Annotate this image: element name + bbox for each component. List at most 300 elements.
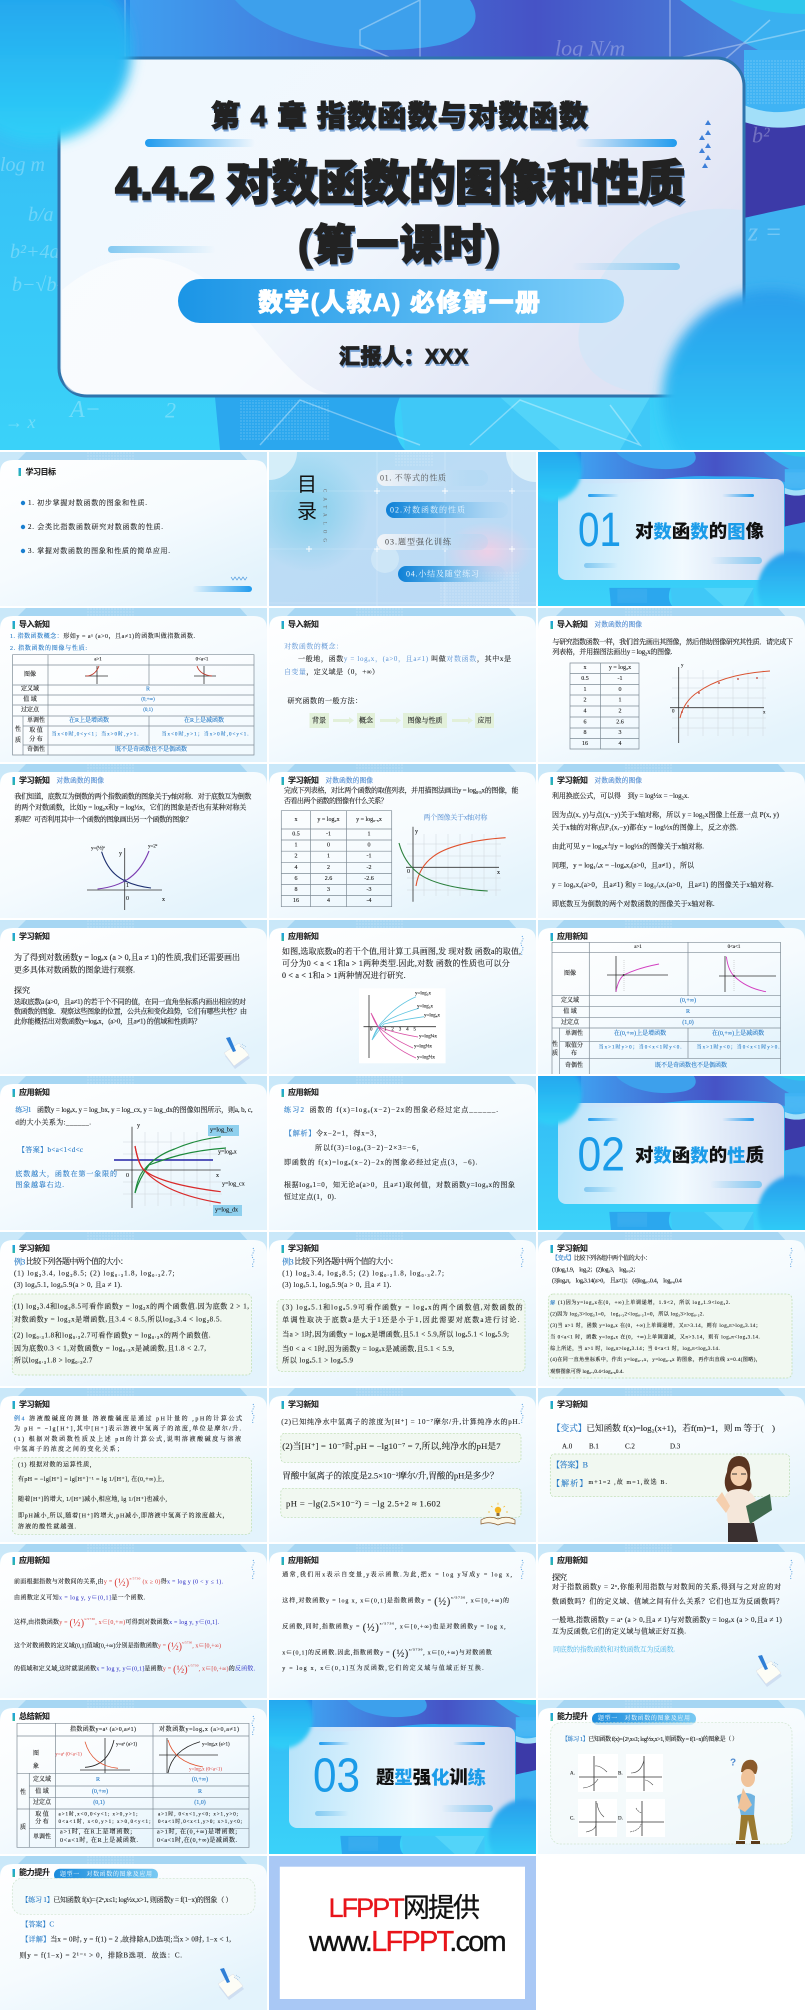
- corner blobs: [0, 0, 805, 450]
- option graph A: A.: [570, 1772, 575, 1776]
- chart: exponential pair: [55, 1738, 137, 1773]
- chart: exponentials: y: [119, 851, 122, 857]
- panel: inverse relationship colored: [0, 1544, 267, 1698]
- answer box: [548, 1294, 792, 1378]
- bars: [584, 494, 762, 568]
- property table: 0<a<1: [728, 945, 741, 950]
- derivation lines: 由此可见 y = log₂x与y = log½x的图像关于x轴对称.: [552, 842, 704, 851]
- main title: 4.4.2 对数函数的图像和性质: [115, 156, 685, 210]
- corner blobs: [252, 1686, 562, 1875]
- paragraph: 可分为0 < a < 1和a > 1两种类型.因此,对数 函数的性质也可以分: [282, 958, 510, 968]
- panel: practice answer: [0, 1856, 267, 2010]
- panel: example 3 part 1: [0, 1232, 267, 1386]
- heading: 学习新知: [19, 931, 50, 941]
- explore paragraph: 选取底数a (a>0，且a≠1) 的若干个不同的值，在同一直角坐标系内画出相应的对: [14, 997, 246, 1007]
- chart: family of log curves: y=log⅓x: [414, 1044, 432, 1050]
- heading: 学习新知: [557, 775, 588, 785]
- intro lines: 1. 指数函数概念：形如y = aˣ (a>0，且a≠1)的函数叫做指数函数.: [10, 632, 196, 640]
- comparison table: (1,0): [194, 1799, 206, 1806]
- answer box: 所以log₀.₃1.8 > log₀.₃2.7: [14, 1356, 93, 1365]
- answer box: 因为底数0.3 < 1,对数函数y = log₀.₃x是减函数,且1.8 < 2.7,: [14, 1343, 206, 1352]
- property table: 0<a<1: [196, 658, 209, 662]
- derivation text: 的值域和定义域,这时就说函数x = log y, y∈(0,1]是函数y = (½): [14, 1664, 188, 1675]
- paragraph: [284, 785, 518, 805]
- panel: log type graph: [269, 920, 536, 1074]
- value table: 6: [584, 720, 586, 726]
- question: (3)logₐπ， logₐ3.14(a>0， 且a≠1)； (4)log₀.₇0.4， log₀.₆0.4: [552, 1277, 682, 1285]
- derivation text: [282, 1571, 512, 1672]
- answer: 【答案】C: [22, 1919, 54, 1928]
- paragraph: 否看出两个函数的图像有什么关系？: [284, 796, 388, 805]
- chart: mirrored logs: [399, 827, 506, 902]
- value table: 4: [584, 708, 586, 714]
- value table: -3: [366, 887, 372, 893]
- property table: 既不是奇函数也不是偶函数: [115, 745, 187, 753]
- intro paragraph: 为了得到对数函数y = logₐx (a > 0,且a ≠ 1)的性质,我们还需要画出: [14, 952, 240, 962]
- comparison table: a>1时, 在(0,+∞)是增函数;: [157, 1828, 237, 1836]
- value table: 3: [327, 887, 330, 893]
- goal list: 1. 初步掌握对数函数的图象和性质.: [28, 498, 147, 507]
- contents item 01: 01. 不等式的性质: [380, 472, 446, 482]
- property table: a>1: [634, 945, 642, 950]
- card inner soft shapes: [62, 209, 742, 394]
- solution: [284, 1128, 515, 1202]
- contents item 02: [386, 502, 508, 518]
- panel: table of contents slide: [269, 452, 536, 606]
- property table: 既不是奇函数也不是偶函数: [655, 1061, 727, 1069]
- faint math formula decoration: A−: [68, 397, 101, 423]
- heading: 总结新知: [19, 1711, 50, 1721]
- comparison table: (0,+∞): [92, 1788, 108, 1795]
- section number: 03: [313, 1750, 360, 1802]
- property table: 奇偶性: [27, 745, 45, 753]
- section card: [558, 1103, 784, 1204]
- derivation text: x∈(0,1]的反函数.因此,指数函数y = (½): [282, 1648, 408, 1659]
- paragraph: 系呢？可否利用其中一个函数的图象画出另一个函数的图象？: [14, 814, 192, 823]
- value table: 3: [618, 730, 622, 736]
- paragraph: 列表格，并用描图法画出y = log₂x的图像.: [552, 647, 673, 657]
- mini chart: decay: [194, 666, 216, 684]
- property table: 质: [15, 736, 21, 744]
- solution: 即函数的 f(x)=logₐ(x−2)−2x的图象必经过定点(3，−6).: [284, 1157, 478, 1167]
- value table: -1: [618, 676, 622, 682]
- property table: 定义域: [21, 684, 39, 692]
- heading: 导入新知: [557, 619, 588, 629]
- panel: exercise 1: [0, 1076, 267, 1230]
- paragraph: 的两个对数函数，比如y = log₂x和y = log½x，它们的图象是否也有某种对称关: [14, 803, 246, 813]
- property table: 当x<0时,0<y<1；当x>0时,y>1.: [52, 730, 138, 738]
- answer box: 即pH减小,所以,随着[H⁺]的增大,pH减小,即溶液中氢离子的浓度越大，: [18, 1512, 228, 1520]
- derivation text: 得x = log y (0 < y ≤ 1).: [161, 1579, 223, 1585]
- value table: 0.5: [292, 832, 300, 838]
- property table: 布: [571, 1049, 577, 1057]
- property table: 值 域: [23, 695, 37, 703]
- explore text: [552, 1572, 783, 1636]
- value table: y = log₂x: [317, 817, 340, 823]
- panel: exercise 2: [269, 1076, 536, 1230]
- answer box: 随着[H⁺]的增大, 1/[H⁺]减小,相应地, lg 1/[H⁺]也减小,: [18, 1495, 168, 1503]
- comparison table: [17, 1723, 249, 1847]
- value table: [570, 663, 639, 749]
- panel: learning goals slide: [0, 452, 267, 606]
- bars: [584, 1118, 762, 1192]
- question: (1) log₂3.4, log₂8.5; (2) log₀.₃1.8, log₀.₃2.7;: [14, 1269, 175, 1277]
- panel: variation with teacher: [538, 1388, 805, 1542]
- derivation lines: 同理，y = log₁/ₐx = −logₐx,(a>0，且a≠1) ，所以: [552, 860, 695, 870]
- value table: -4: [366, 898, 372, 904]
- contents heading: 录: [297, 501, 317, 523]
- chart: exponentials: y=(½)ˣ: [91, 846, 105, 852]
- derivation text: y = log x, x∈(0,1]互为反函数,它们的定义域与值域正好互换.: [282, 1664, 484, 1672]
- chart: exponentials: y=2ˣ: [148, 844, 158, 850]
- faint math formula decoration: z =: [747, 218, 782, 246]
- heading: 学习目标: [26, 466, 56, 476]
- chart: family of log curves: y=log½x: [417, 1056, 435, 1060]
- heading: [12, 775, 104, 785]
- goal list: [21, 498, 170, 555]
- derivation text: 前面根据指数与对数间的关系,由y = (½): [14, 1577, 129, 1588]
- chapter heading: 第 4 章 指数函数与对数函数: [211, 99, 588, 133]
- teacher figure: [716, 1456, 772, 1542]
- question: (3) logₐ5.1, logₐ5.9(a > 0, 且a ≠ 1).: [14, 1281, 122, 1289]
- derivation text: , x∈[0,+∞)也是对数函数y = log x,: [395, 1622, 506, 1630]
- property table: 在(0,+∞)上是减函数: [712, 1029, 764, 1037]
- line chart: log2: x: [763, 710, 766, 716]
- question: (1) 根据对数函数性质及上述 pH的计算公式,说明溶液酸碱度与溶液: [14, 1435, 241, 1443]
- heading: 应用新知: [288, 931, 319, 941]
- derivation text: x/5730: [188, 1663, 199, 1667]
- comparison table: 过定点: [33, 1798, 52, 1806]
- value table: 8: [294, 887, 298, 893]
- derivation text: , x∈[0,+∞): [192, 1643, 221, 1650]
- dotted decoration: [521, 936, 523, 955]
- flow diagram: 应用: [478, 716, 492, 724]
- chart: four log curves: 0: [126, 1173, 129, 1179]
- heading: 应用新知: [557, 1555, 588, 1565]
- intro paragraph: [14, 952, 240, 974]
- property table: 取 值: [29, 726, 43, 734]
- heading: 对数函数的图像: [326, 776, 373, 784]
- heading: 学习新知: [19, 775, 50, 785]
- flow diagram: 图像与性质: [408, 716, 442, 724]
- value table: 2: [294, 854, 298, 860]
- chart: mirrored logs: x: [497, 870, 500, 876]
- contents background: [269, 452, 536, 606]
- promo background: [269, 1856, 536, 2010]
- section card: [289, 1727, 515, 1828]
- heading: 学习新知: [557, 1243, 588, 1253]
- derivation text: , x∈[0,+∞): [95, 1619, 125, 1626]
- option graph C: C.: [570, 1816, 575, 1822]
- value table: 1: [584, 687, 586, 693]
- icon: notepad and pen: [756, 1655, 782, 1687]
- contents heading: CATALOG: [322, 489, 326, 542]
- property table: 过定点: [561, 1018, 580, 1026]
- chart: four log curves: y=logₐx: [218, 1150, 237, 1156]
- property table: 性: [552, 1040, 558, 1048]
- dotted decoration: [252, 1248, 254, 1267]
- concept text: 一般地，函数y = logₐx，(a>0，且a≠1) 叫做对数函数，其中x是: [298, 654, 511, 664]
- hero background: [0, 0, 805, 450]
- value table: x: [584, 665, 586, 671]
- answer box: 综上所述，当 a>1 时，logₐπ>logₐ3.14；当 0<a<1 时，logₐπ<logₐ3.14.: [550, 1345, 720, 1352]
- paragraph: 如图,选取底数a的若干个值,用计算工具画图,发 现对数 函数a的取值,: [282, 946, 521, 956]
- answer box: [550, 1454, 790, 1497]
- chart caption: 两个图像关于x轴对称: [424, 813, 488, 822]
- heading: 应用新知: [19, 1555, 50, 1565]
- faint math formula decoration: b/a: [28, 204, 54, 226]
- question: 中氢离子的浓度之间的变化关系；: [14, 1445, 123, 1453]
- value table: y = log₀.₅x: [356, 817, 382, 823]
- derivation text: 反函数,同时,指数函数y = (½): [282, 1622, 379, 1633]
- comparison table: 性: [20, 1788, 26, 1796]
- comparison table: R: [96, 1777, 100, 1783]
- answer box: 对数函数y = log₂x是增函数,且3.4 < 8.5,所以log₂3.4 < log₂8.5.: [14, 1314, 222, 1323]
- concept text: 研究函数的一般方法：: [288, 696, 362, 705]
- dotted decoration: [252, 1716, 254, 1735]
- faint math formula decoration: log m: [0, 154, 45, 176]
- value table: 1: [618, 698, 622, 704]
- chart: family of log curves: y=log₄x: [424, 1014, 440, 1018]
- faint math formula decoration: b²: [752, 122, 770, 148]
- answer box: (1) 根据对数的运算性质,: [18, 1460, 92, 1468]
- explore paragraph: [14, 985, 247, 1027]
- explanation: 则y = f(1−x) = 2¹⁻ˣ > 0，排除B选项．故选：C.: [20, 1951, 182, 1961]
- value table: 1: [327, 854, 330, 860]
- heading: 应用新知: [19, 1087, 50, 1097]
- subject pill: [178, 279, 624, 323]
- decorative bars: [108, 139, 680, 270]
- panel: example 4 pH: [0, 1388, 267, 1542]
- comparison table: 值 域: [35, 1787, 49, 1795]
- paragraph: [282, 946, 521, 980]
- heading: 对数函数的图像: [56, 776, 104, 784]
- chart: four log curves: y=log_bx: [210, 1128, 233, 1134]
- note: 底数越大，函数在第一象限的: [15, 1169, 117, 1179]
- heading: [550, 619, 642, 629]
- answer box: [277, 1299, 525, 1372]
- panel: symmetry derivation: [538, 764, 805, 918]
- comparison table: 0<a<1时,0<x<1,y>0; x>1,y<0;: [158, 1818, 242, 1825]
- panel: log function concept: [269, 608, 536, 762]
- derivation text: 这样,由指数函数y = (½): [14, 1618, 84, 1628]
- value table: -1: [326, 832, 331, 838]
- answer box: 当a > 1时,因为函数y = logₐx是增函数,且5.1 < 5.9,所以 logₐ5.1 < logₐ5.9;: [282, 1329, 509, 1338]
- corner bar decoration: [192, 577, 252, 592]
- intro paragraph: 更多具体对数函数的图象进行观察.: [14, 964, 135, 974]
- heading: 应用新知: [288, 1555, 319, 1565]
- corner blobs: [538, 1076, 805, 1230]
- icon: notepad and pen: [218, 1968, 244, 2000]
- solution: 【解析】令x−2=1，得x=3，: [285, 1128, 381, 1138]
- panel: reciprocal base question: [0, 764, 267, 918]
- comparison table: a>1时, 在R上是增函数;: [60, 1828, 132, 1836]
- derivation text: x/5730: [84, 1617, 95, 1621]
- heading: 学习新知: [288, 775, 319, 785]
- chart: family of log curves: y=log₂x: [415, 992, 431, 996]
- chart: logarithmic pair: y=logₐx (a>1): [202, 1742, 230, 1748]
- comparison table: (0,1): [93, 1799, 105, 1806]
- answer box: 【答案】B: [552, 1460, 588, 1470]
- value table: -2: [366, 865, 372, 871]
- chart: four log curves: x: [216, 1173, 219, 1179]
- comparison table: 0<a<1时, 在R上是减函数.: [60, 1836, 138, 1844]
- chart: four log curves: y=log_cx: [222, 1182, 245, 1188]
- thinking man figure: ?: [730, 1758, 736, 1768]
- property table: 性: [15, 725, 21, 733]
- options: B.1: [589, 1443, 599, 1451]
- dotted decoration: [521, 1248, 523, 1267]
- answer box: [12, 1457, 251, 1534]
- comparison table: 取 值: [35, 1810, 49, 1818]
- value table: 4: [618, 741, 622, 747]
- panel: summary table: [0, 1700, 267, 1854]
- contents item 04: [398, 566, 505, 582]
- heading: 对数函数的图像: [594, 776, 642, 784]
- line chart: log2: 0: [672, 710, 675, 714]
- stomach acid question: 胃酸中氢离子的浓度是2.5×10⁻²摩尔/升,胃酸的pH是多少？: [282, 1470, 498, 1481]
- answer: 【答案】b<a<1<d<c: [18, 1145, 83, 1154]
- goal list: 3. 掌握对数函数的图象和性质的简单应用.: [28, 546, 170, 555]
- value table: 1: [368, 832, 370, 838]
- note: 图象越靠右边.: [15, 1180, 64, 1189]
- value table: x: [294, 817, 298, 823]
- chart: exponentials: 1: [126, 883, 129, 889]
- comparison table: 象: [33, 1762, 39, 1770]
- option graph D: [618, 1799, 665, 1837]
- question type pill: 题型一 对数函数的图象及应用: [598, 1714, 690, 1722]
- contents item 03: [377, 534, 488, 550]
- explore text: 互为反函数,它们的定义域与值域正好互换.: [552, 1627, 686, 1636]
- chart: logarithmic pair: y=logₐx (0<a<1): [189, 1768, 222, 1772]
- section title: 对数函数的性质: [635, 1144, 764, 1166]
- answer box: (4)在同一直角坐标系中，作出 y=log₀.₇x，y=log₀.₆x 的图象，再作出直线 x=0.4(图略)，: [550, 1356, 761, 1363]
- question: 为 pH = −lg[H⁺],其中[H⁺]表示溶液中氢离子的浓度,单位是摩尔/升.: [14, 1425, 241, 1433]
- explanation: 【详解】当x = 0时, y = f(1) = 2 ,故排除A,D选项;当x > 0时, 1−x < 1,: [22, 1935, 231, 1944]
- derivation text: 的反函数.: [229, 1666, 255, 1672]
- answer box: 有pH = −lg[H⁺] = lg[H⁺]⁻¹ = lg 1/[H⁺], 在(0,+∞)上,: [18, 1475, 164, 1483]
- heading: 应用新知: [288, 1087, 319, 1097]
- value table: 4: [327, 898, 330, 904]
- answer box: 【解析】m+1=2 ,故 m=1,故选 B.: [552, 1478, 668, 1488]
- panel: example 3 part 2: [269, 1232, 536, 1386]
- property table: 定义域: [561, 996, 579, 1004]
- section background: [538, 452, 805, 606]
- chart: exponentials: [87, 844, 165, 910]
- question: 例4 溶液酸碱度的测量 溶液酸碱度是通过 pH计量的 ,pH的计算公式: [14, 1414, 242, 1422]
- dotted decoration: [790, 1560, 792, 1579]
- comparison table: 质: [20, 1823, 26, 1831]
- mini chart: a between 0 and 1: [719, 956, 776, 992]
- question: 【变式】已知函数 f(x)=log₂(x+1)，若f(m)=1，则 m 等于( ): [552, 1422, 775, 1434]
- answer box: 解 (1)因为y=log₂x在(0，+∞)上单调递增，1.9<2，所以 log₂1.9<log₂2.: [550, 1299, 730, 1306]
- question: 函数的 f(x)=logₐ(x−2)−2x的图象必经过定点______.: [310, 1105, 498, 1114]
- property table: 当x<0时,y>1；当x>0时,0<y<1.: [162, 730, 248, 738]
- property table: 单调性: [27, 716, 45, 724]
- contents item 04: 04.小结及随堂练习: [406, 568, 479, 578]
- value table: 16: [582, 741, 588, 747]
- question 2: (2)已知纯净水中氢离子的浓度为[H⁺] = 10⁻⁷摩尔/升,计算纯净水的pH.: [281, 1417, 520, 1426]
- derivation lines: 利用换底公式，可以得 到y = log½x = −log₂x.: [552, 791, 689, 801]
- property table: R: [146, 686, 150, 692]
- promo line 2: www.LFPPT.com: [308, 1926, 507, 1958]
- comparison table: 0<a<1时, x<0,y>1; x>0,0<y<1;: [58, 1818, 150, 1825]
- panel: section 02 slide: [538, 1076, 805, 1230]
- value table: -1: [366, 854, 372, 860]
- property table: 在R上是增函数: [69, 716, 109, 724]
- chart: logarithmic pair: [159, 1738, 230, 1773]
- answer box: (2)因为 log₂3>log₂1=0， log₀.₂2<log₀.₂1=0，所以 log₂3>log₀.₂2.: [550, 1310, 704, 1318]
- panel: explore inverse: [538, 1544, 805, 1698]
- panel: practice with four graphs: [538, 1700, 805, 1854]
- explore text: 一般地,指数函数y = aˣ (a > 0,且a ≠ 1)与对数函数y = logₐx (a > 0,且a ≠ 1): [552, 1615, 782, 1624]
- heading: 导入新知: [19, 619, 50, 629]
- chart: family of log curves: 1 2 3 4 5: [384, 1028, 416, 1032]
- faint math formula decoration: [0, 0, 805, 445]
- solution: 恒过定点(1，0).: [284, 1192, 336, 1202]
- question: (1) log₂3.4, log₂8.5; (2) log₀.₃1.8, log₀.₃2.7;: [282, 1269, 444, 1277]
- line chart: log2: y: [681, 664, 684, 668]
- value table: 0: [327, 843, 330, 849]
- property table: a>1: [94, 658, 102, 662]
- heading: 能力提升: [557, 1711, 588, 1721]
- paragraph: 0 < a < 1和a > 1两种情况进行研究.: [282, 970, 406, 980]
- explore paragraph: 探究: [14, 985, 30, 995]
- question box: [12, 1878, 255, 1914]
- faint math formula decoration: b²+4ac: [10, 241, 68, 263]
- property table: 图像: [24, 670, 36, 678]
- section background: [269, 1700, 536, 1854]
- thinking man figure: [730, 1758, 760, 1844]
- question: (1)log₂1.9， log₂2；(2)log₂3， log₀.₂2；: [552, 1267, 639, 1274]
- section title: 题型强化训练: [376, 1766, 486, 1788]
- options: [562, 1443, 681, 1451]
- question: 练习1: [15, 1105, 32, 1114]
- faint math formula decoration: → x: [5, 412, 36, 432]
- options: A.0: [562, 1443, 573, 1451]
- property table: R: [686, 1009, 690, 1015]
- question box: 【练习 1】已知函数 f(x)={2ˣ,x≤1; log½x,x>1, 则函数y = f(1−x)的图象（ ）: [22, 1895, 232, 1904]
- derivation text: x/5730: [182, 1641, 192, 1645]
- option graph D: D.: [618, 1816, 623, 1822]
- question: [282, 1256, 444, 1289]
- comparison table: 指数函数y=aˣ (a>0,a≠1): [70, 1725, 136, 1733]
- heading: [550, 775, 642, 785]
- answer box: (3)当 a>1 时，函数 y=logₐx 在(0，+∞)上单调递增，又π>3.14，则有 logₐπ>logₐ3.14；: [550, 1322, 761, 1329]
- panel: log property table: [538, 920, 805, 1074]
- property table: 过定点: [21, 706, 40, 714]
- derivation text: , x∈[0,+∞): [199, 1665, 229, 1672]
- presenter: 汇报人：XXX: [339, 346, 468, 368]
- options: C.2: [625, 1443, 635, 1451]
- answer box 3: pH = −lg(2.5×10⁻²) = −lg 2.5+2 ≈ 1.602: [286, 1498, 440, 1508]
- section background: [538, 1076, 805, 1230]
- flow diagram: 概念: [359, 716, 374, 724]
- answer box: (3) logₐ5.1和logₐ5.9可看作函数y = logₐx的两个函数值,对数函数的: [282, 1303, 523, 1312]
- dotted decoration: [252, 1560, 254, 1579]
- value table: 16: [293, 898, 299, 904]
- section number: 02: [578, 1128, 625, 1182]
- value table: 6: [294, 876, 298, 882]
- value table: 2: [618, 708, 622, 714]
- section title: 对数函数的图像: [635, 520, 765, 542]
- chart: exponentials: 0: [126, 896, 129, 902]
- explore text: 探究: [552, 1572, 567, 1582]
- value table: 0: [368, 843, 370, 849]
- question: [552, 1254, 682, 1285]
- heading: 能力提升: [19, 1867, 50, 1877]
- answer box: 当 0<a<1 时，函数 y=logₐx 在(0，+∞)上单调递减，又π>3.14，则有 logₐπ<logₐ3.14.: [550, 1334, 760, 1340]
